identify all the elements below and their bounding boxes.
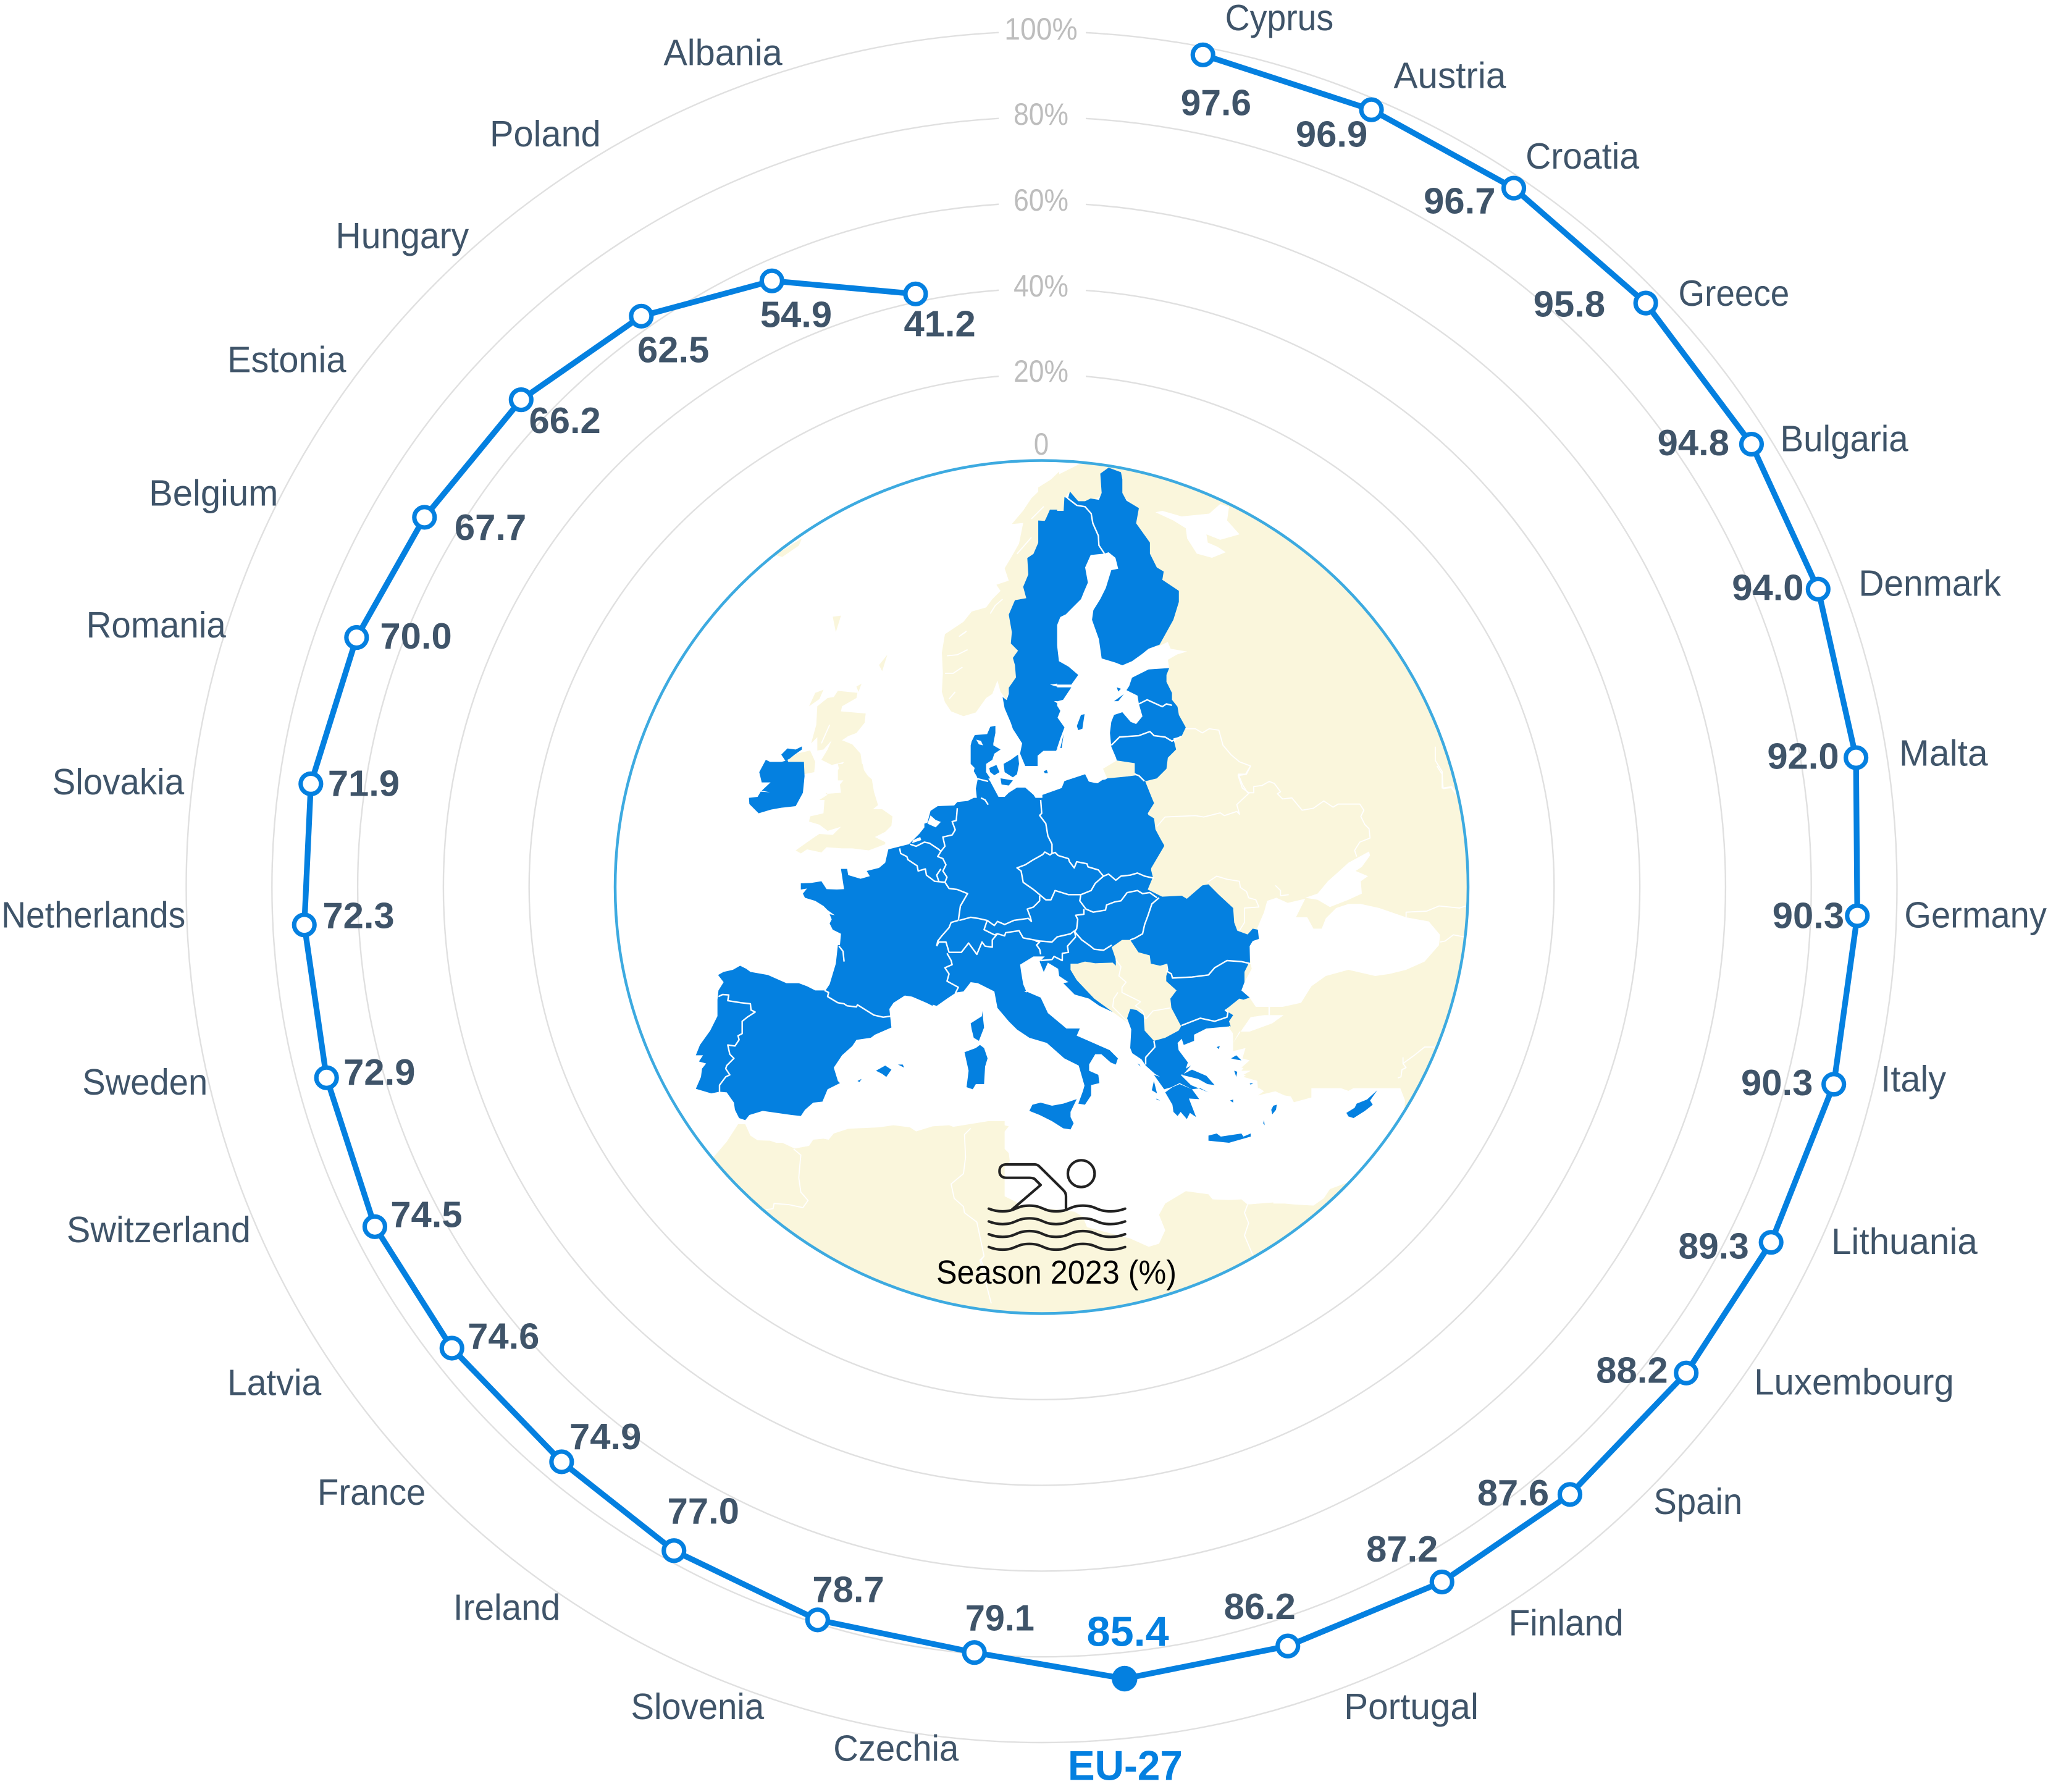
value labels: 90.3 xyxy=(1773,894,1844,936)
value labels: 77.0 xyxy=(668,1491,739,1532)
value labels xyxy=(322,82,1844,1638)
Corsica xyxy=(971,1011,984,1041)
value labels: 67.7 xyxy=(455,507,526,548)
value labels: 41.2 xyxy=(904,303,976,344)
Ionian islands xyxy=(1152,1081,1157,1093)
country labels: Hungary xyxy=(336,215,469,256)
value labels: 96.9 xyxy=(1296,113,1367,154)
seas over land xyxy=(823,504,1440,1043)
country labels: Belgium xyxy=(149,472,278,513)
value labels: 70.0 xyxy=(380,615,452,657)
country labels: Luxembourg xyxy=(1754,1361,1954,1403)
country labels: Austria xyxy=(1393,55,1506,96)
Rhodes xyxy=(1271,1104,1277,1114)
map caption: Season 2023 (%) xyxy=(936,1254,1177,1291)
EU-27 label: EU-27 xyxy=(1068,1743,1183,1789)
country labels: Poland xyxy=(490,113,601,154)
value labels: 72.3 xyxy=(322,894,395,936)
axis labels: 100% xyxy=(1004,12,1078,46)
axis labels xyxy=(1004,12,1078,461)
country labels: Finland xyxy=(1509,1602,1624,1644)
water bodies over EU land xyxy=(912,684,1057,993)
country labels: Lithuania xyxy=(1831,1221,1978,1262)
country labels: France xyxy=(317,1471,426,1513)
value labels: 71.9 xyxy=(328,763,400,804)
country labels: Sweden xyxy=(82,1061,208,1103)
Denmark xyxy=(971,726,1001,780)
country labels: Spain xyxy=(1653,1481,1742,1522)
country labels: Slovenia xyxy=(631,1686,764,1727)
Ireland xyxy=(749,762,805,814)
country labels: Czechia xyxy=(833,1728,959,1769)
country labels: Switzerland xyxy=(67,1209,251,1250)
country labels: Estonia xyxy=(227,339,346,381)
southern Italy xyxy=(1078,1064,1099,1104)
Baltic states xyxy=(1110,668,1186,781)
country labels: Italy xyxy=(1881,1058,1946,1100)
Sweden east xyxy=(1038,497,1104,751)
value labels: 95.8 xyxy=(1534,284,1605,325)
Cyprus xyxy=(1346,1090,1377,1118)
Poland north xyxy=(1043,774,1164,870)
value labels: 96.7 xyxy=(1424,180,1495,222)
Peloponnese xyxy=(1165,1084,1199,1119)
country borders xyxy=(718,498,1466,1303)
Gotland xyxy=(1077,714,1085,730)
value labels: 66.2 xyxy=(529,400,601,441)
value labels: 87.2 xyxy=(1366,1528,1438,1570)
data line xyxy=(304,55,1857,1679)
Sicily xyxy=(1030,1099,1076,1129)
value labels: 89.3 xyxy=(1679,1225,1749,1266)
Balearic islands xyxy=(876,1066,891,1077)
Crete xyxy=(1209,1134,1251,1143)
EU-27 average value: 85.4 xyxy=(1087,1609,1169,1655)
Sweden west xyxy=(1002,510,1057,766)
country labels: Netherlands xyxy=(1,894,185,936)
country labels: Ireland xyxy=(453,1586,560,1628)
Albania xyxy=(1127,1009,1154,1066)
country labels: Albania xyxy=(663,32,783,74)
non-EU land xyxy=(700,464,1485,1328)
Danube delta xyxy=(1248,928,1259,963)
country labels: Slovakia xyxy=(52,761,184,802)
value labels: 87.6 xyxy=(1477,1472,1549,1513)
country labels: Denmark xyxy=(1858,562,2001,604)
Oland xyxy=(1060,734,1064,748)
value labels: 72.9 xyxy=(343,1051,416,1093)
Greece mainland xyxy=(1146,1015,1229,1092)
Lolland xyxy=(1001,778,1013,786)
country labels: Romania xyxy=(86,604,226,646)
country labels: Malta xyxy=(1899,732,1988,773)
Central Europe and Italy xyxy=(925,764,1249,1087)
value labels: 54.9 xyxy=(760,294,832,335)
icon: swimmer xyxy=(989,1160,1125,1250)
value labels: 88.2 xyxy=(1596,1349,1668,1390)
axis labels: 20% xyxy=(1014,354,1068,389)
value labels: 86.2 xyxy=(1224,1586,1296,1627)
value labels: 74.5 xyxy=(390,1194,463,1235)
value labels: 94.8 xyxy=(1658,422,1729,463)
Finland xyxy=(1068,468,1179,665)
value labels: 74.9 xyxy=(569,1416,641,1457)
axis labels: 80% xyxy=(1014,97,1068,132)
value labels: 90.3 xyxy=(1741,1062,1813,1103)
Sardinia xyxy=(965,1045,988,1089)
country labels: Latvia xyxy=(227,1362,321,1403)
data markers xyxy=(294,44,1868,1691)
map of Europe inside circle xyxy=(695,464,1467,1312)
map circle outline xyxy=(615,461,1468,1313)
value labels: 97.6 xyxy=(1181,82,1251,124)
country labels: Portugal xyxy=(1344,1686,1479,1727)
Ireland north xyxy=(759,760,804,783)
axis labels: 60% xyxy=(1014,183,1068,217)
Evia xyxy=(1181,1070,1215,1085)
country labels: Bulgaria xyxy=(1780,418,1908,460)
country labels: Greece xyxy=(1679,272,1789,314)
value labels: 78.7 xyxy=(812,1569,884,1610)
value labels: 79.1 xyxy=(965,1597,1034,1638)
country labels: Croatia xyxy=(1526,135,1639,177)
value labels: 74.6 xyxy=(468,1315,539,1357)
EU member states xyxy=(696,468,1377,1143)
axis labels: 0 xyxy=(1034,427,1049,461)
axis labels: 40% xyxy=(1014,269,1068,303)
value labels: 62.5 xyxy=(637,329,709,371)
France, Benelux and Iberia xyxy=(696,823,939,1120)
value labels: 92.0 xyxy=(1767,735,1839,776)
Aegean islands xyxy=(1231,1055,1241,1061)
value labels: 94.0 xyxy=(1732,567,1804,608)
